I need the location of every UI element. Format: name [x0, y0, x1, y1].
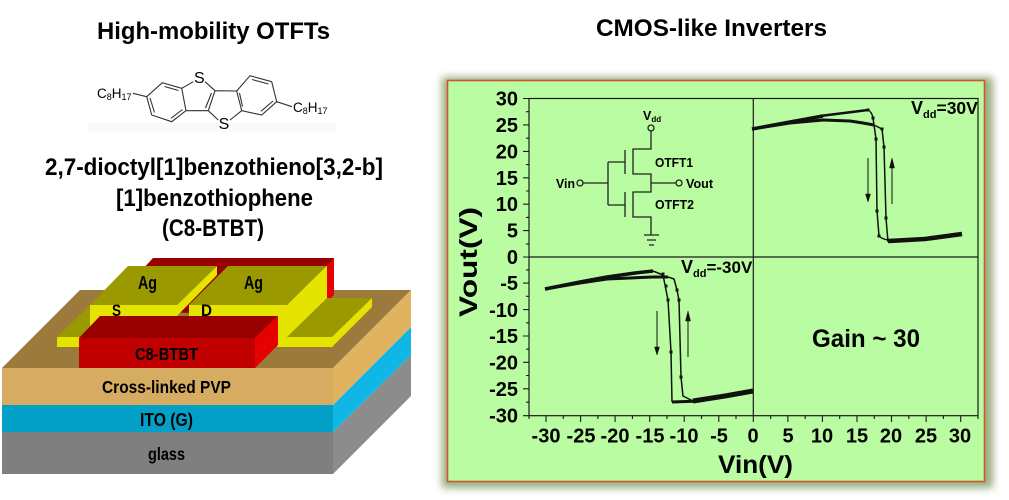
molecular structure: C8-BTBT [87, 70, 337, 133]
x axis labels: 30 [949, 426, 971, 448]
y axis title: Vout(V) [455, 207, 483, 317]
y axis labels: 5 [507, 220, 518, 242]
molecular structure: C8-BTBT: S [194, 70, 205, 87]
curve: Vdd 30V hysteresis [752, 110, 962, 242]
plot frame and axes [523, 98, 978, 422]
layer: glass [2, 355, 411, 474]
inset: CMOS inverter circuit: OTFT2 [655, 198, 694, 212]
inset: CMOS inverter circuit: V [643, 109, 651, 123]
y axis labels: -25 [489, 379, 518, 401]
label: Vdd=30V: V [911, 98, 923, 118]
x axis labels: -10 [670, 426, 698, 448]
y axis labels: -15 [489, 326, 518, 348]
y axis labels: -5 [500, 273, 518, 295]
x axis labels: -30 [532, 426, 560, 448]
back part of C8-BTBT layer [105, 258, 334, 316]
label: Vdd=30V: =30V [936, 98, 978, 118]
y axis labels [489, 88, 518, 428]
layer: glass: glass [148, 444, 185, 464]
molecular structure: C8-BTBT: H [112, 86, 122, 101]
arrows: Vdd -30V sweep direction [654, 311, 690, 357]
layer: cross-linked PVP [2, 290, 411, 405]
molecular structure: C8-BTBT: C [97, 86, 107, 101]
data markers: Vdd 30V [866, 108, 888, 238]
inset: CMOS inverter circuit: Vin [556, 177, 575, 191]
inset: CMOS inverter circuit [556, 109, 714, 245]
panel: inverter chart background [442, 77, 993, 488]
molecular structure: C8-BTBT: 8 [303, 106, 308, 116]
y axis labels: -30 [489, 406, 518, 428]
x axis labels: 25 [915, 426, 937, 448]
y axis labels: 25 [496, 115, 518, 137]
layer: cross-linked PVP: Cross-linked PVP [102, 377, 231, 397]
molecular structure: C8-BTBT: S [219, 116, 229, 133]
layer: ITO gate [2, 327, 411, 432]
label: Vdd=30V: dd [923, 109, 936, 121]
molecular structure: C8-BTBT: C [293, 100, 303, 115]
source electrode, Ag: Ag [138, 273, 157, 293]
x axis labels: -5 [710, 426, 728, 448]
x axis labels: -20 [601, 426, 629, 448]
x axis labels: 0 [747, 426, 759, 448]
y axis labels: -10 [489, 300, 518, 322]
molecular structure: C8-BTBT: 17 [318, 106, 328, 116]
x axis labels: -15 [636, 426, 664, 448]
C8-BTBT layer: C8-BTBT [135, 344, 198, 364]
x axis title: Vin(V) [718, 451, 793, 479]
x axis labels: 15 [846, 426, 868, 448]
x axis labels: 10 [811, 426, 833, 448]
molecular structure: C8-BTBT: 17 [122, 92, 132, 102]
data markers: Vdd -30V [662, 272, 682, 378]
arrows: Vdd 30V sweep direction [866, 158, 894, 204]
label: Vdd=-30V: dd [693, 268, 706, 280]
chart: voltage transfer characteristics [455, 88, 978, 479]
source electrode, Ag [57, 266, 217, 347]
layer: ITO gate: ITO (G) [140, 410, 193, 430]
x axis labels: 5 [782, 426, 794, 448]
inset: CMOS inverter circuit: OTFT1 [655, 156, 693, 170]
x axis labels [532, 426, 971, 448]
compound name: (C8-BTBT) [162, 215, 264, 242]
y axis labels: 15 [496, 168, 518, 190]
molecular structure: C8-BTBT: H [308, 100, 318, 115]
drain electrode, Ag: Ag [244, 273, 263, 293]
y axis labels: 20 [496, 142, 518, 164]
x axis labels: 20 [880, 426, 902, 448]
y axis labels: 10 [496, 194, 518, 216]
label: Vdd=-30V: V [681, 257, 693, 277]
y axis labels: 0 [507, 247, 518, 269]
curve: Vdd -30V hysteresis [545, 271, 753, 402]
device stack diagram [2, 258, 411, 474]
compound name [45, 154, 383, 242]
title: CMOS-like Inverters: CMOS-like Inverters [596, 15, 827, 42]
compound name: 2,7-dioctyl[1]benzothieno[3,2-b] [45, 154, 383, 181]
label: Gain ~ 30: Gain ~ 30 [812, 325, 920, 353]
drain electrode, Ag [189, 266, 372, 347]
drain electrode, Ag: D [201, 301, 212, 320]
source electrode, Ag: S [112, 301, 121, 320]
x axis labels: -25 [567, 426, 595, 448]
y axis labels: -20 [489, 352, 518, 374]
compound name: [1]benzothiophene [116, 185, 313, 212]
molecular structure: C8-BTBT: 8 [107, 92, 112, 102]
y axis labels: 30 [496, 88, 518, 110]
inset: CMOS inverter circuit: dd [651, 115, 661, 124]
title: High-mobility OTFTs: High-mobility OTFTs [97, 18, 330, 45]
inset: CMOS inverter circuit: Vout [686, 177, 714, 191]
label: Vdd=-30V: =-30V [706, 258, 753, 277]
C8-BTBT layer [79, 316, 278, 368]
